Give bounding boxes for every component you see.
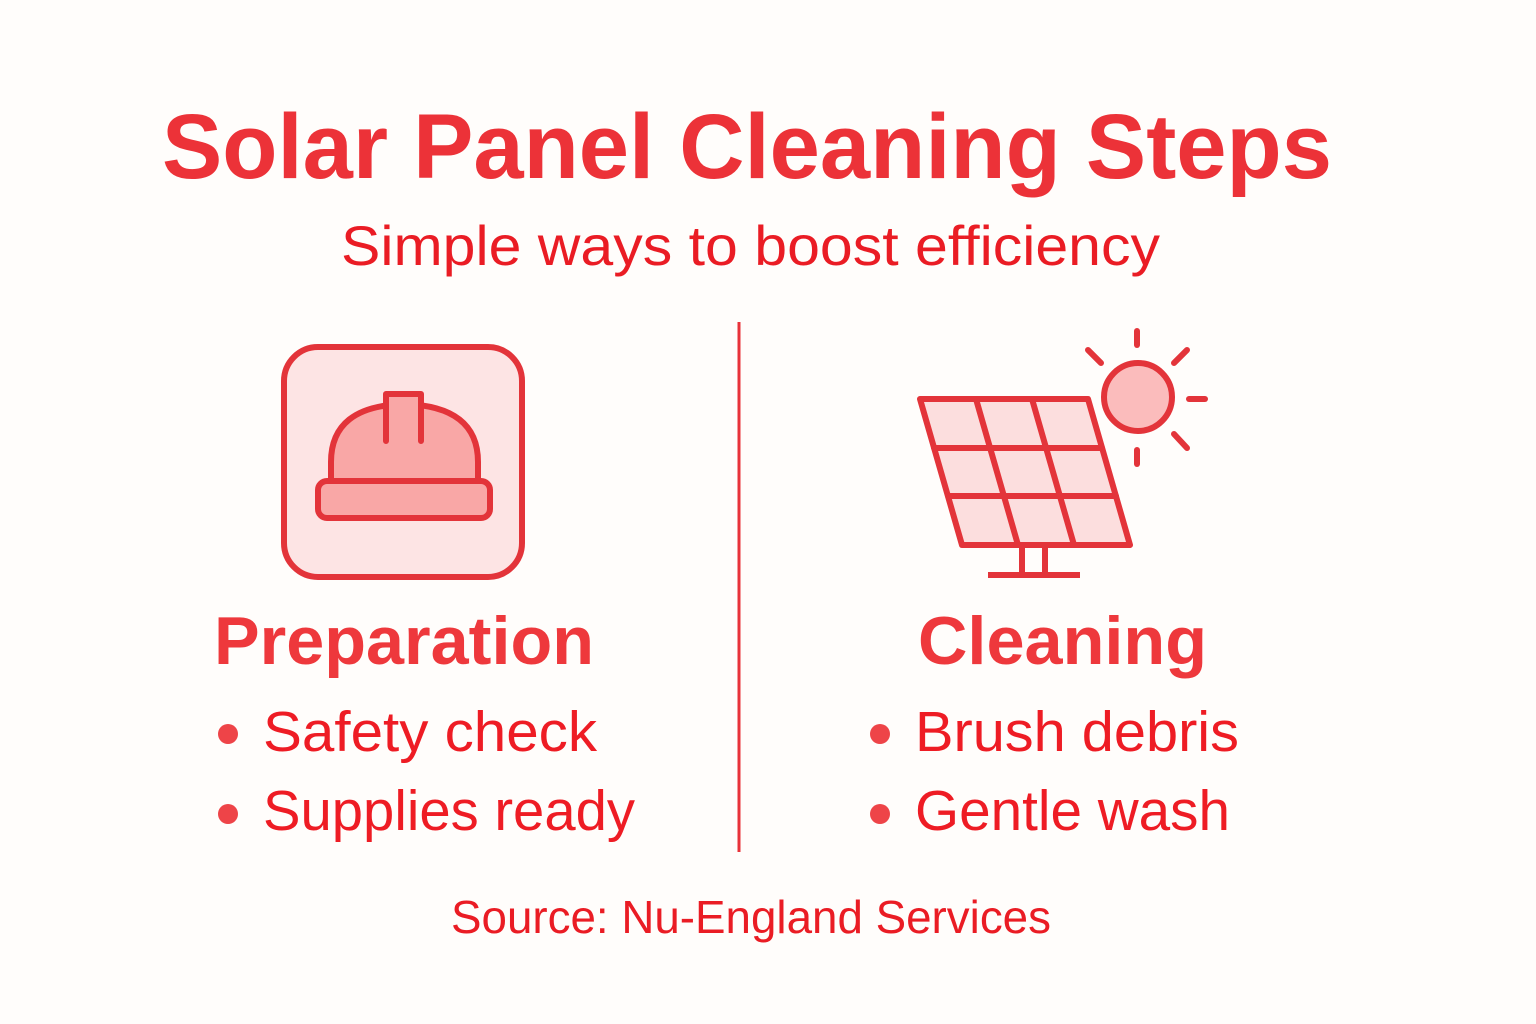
- source: Source: Nu-England Services: [451, 891, 1051, 943]
- bullet list: cleaning: Gentle wash: [915, 779, 1230, 843]
- icon: solar panel with sun: [920, 331, 1205, 575]
- heading: cleaning: Cleaning: [918, 603, 1207, 679]
- bullet list: preparation: Safety check: [263, 700, 597, 764]
- title: Solar Panel Cleaning Steps: [162, 96, 1332, 198]
- heading: preparation: Preparation: [214, 603, 594, 679]
- subtitle: Simple ways to boost efficiency: [341, 214, 1160, 277]
- bullet list: cleaning: [870, 700, 1239, 843]
- bullet list: cleaning: Brush debris: [915, 700, 1239, 764]
- panel: preparation: [214, 347, 635, 843]
- panel: cleaning: [870, 331, 1239, 843]
- bullet list: preparation: [218, 700, 635, 843]
- bullet list: preparation: Supplies ready: [263, 779, 635, 843]
- divider: [738, 322, 740, 852]
- icon: hard hat: [284, 347, 522, 577]
